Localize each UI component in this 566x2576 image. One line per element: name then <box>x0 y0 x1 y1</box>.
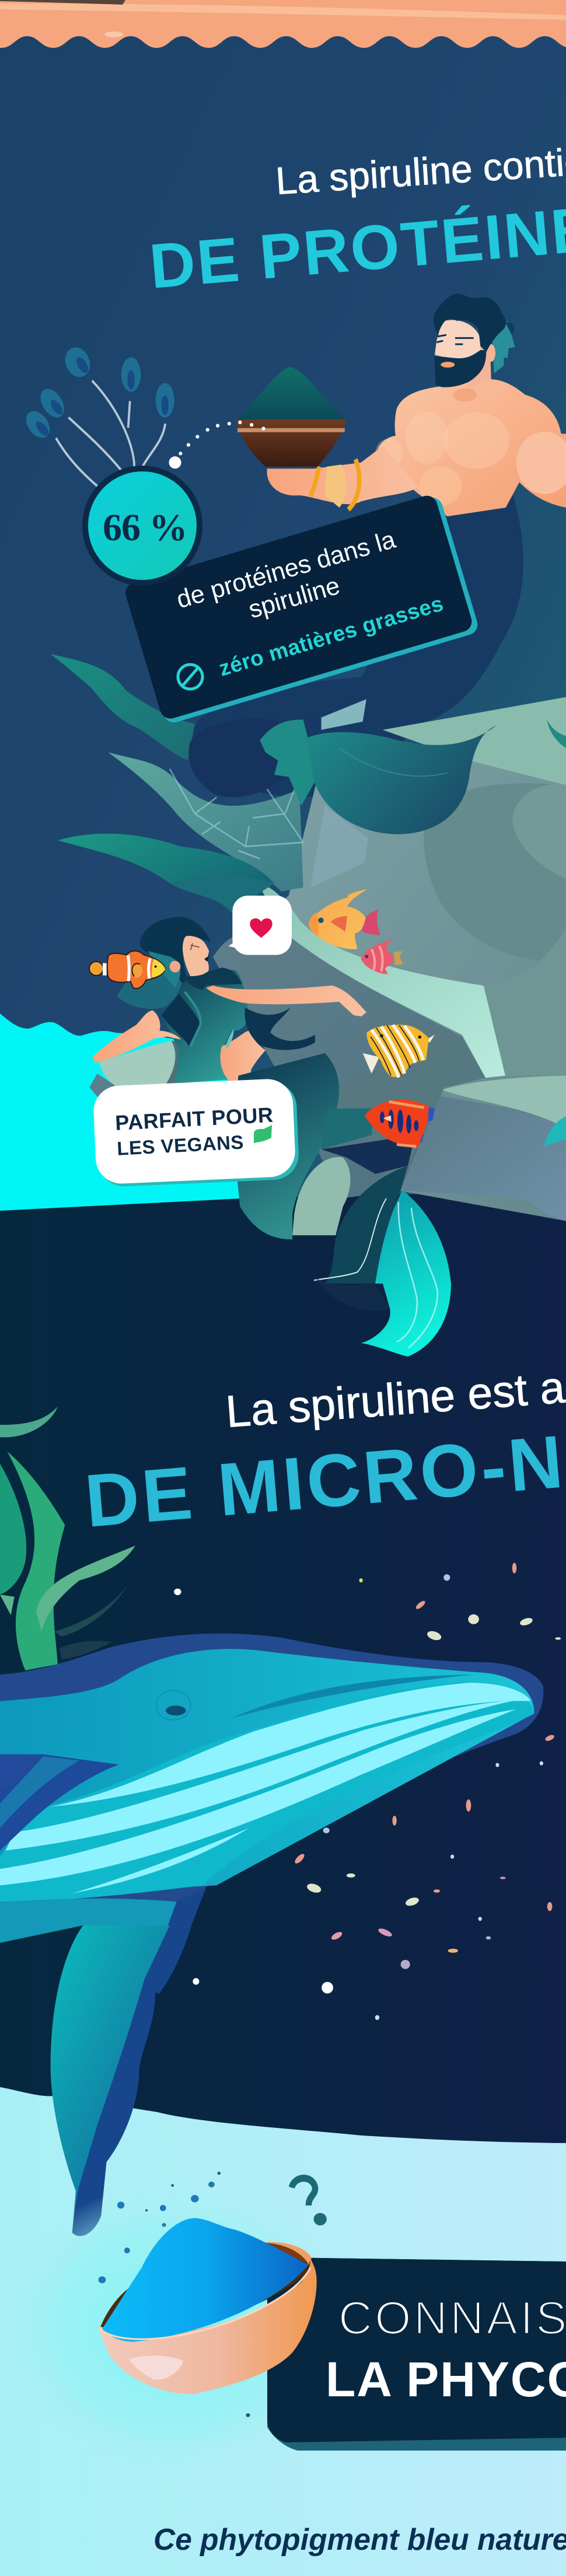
mermaid <box>89 917 315 1099</box>
red fish <box>365 1100 435 1148</box>
krill and plankton cloud <box>174 1563 561 1921</box>
merman arm with bracelets <box>267 446 419 509</box>
sea-plant branches above percentage <box>22 342 174 486</box>
question mark <box>292 2178 327 2225</box>
section background: dark navy sea <box>0 1190 566 2159</box>
callout: perfect for vegans <box>93 1078 300 1187</box>
lower krill and specks <box>193 1927 491 2020</box>
section background: pale blue <box>0 2087 566 2576</box>
bowl of green spirulina <box>236 367 346 467</box>
66 percent badge <box>82 466 202 586</box>
merman tail fin and leaf <box>188 699 566 834</box>
card: protein statement <box>123 492 480 726</box>
mermaid outstretched arm <box>206 985 366 1016</box>
intro sentence: Ce phytopigment bleu naturel <box>153 2522 566 2556</box>
seaweed leaves <box>51 654 303 912</box>
mermaid lower tail <box>235 1053 415 1284</box>
striped yellow fish <box>363 1025 435 1078</box>
section background: blue ocean <box>0 35 566 1225</box>
whale <box>0 1634 543 1925</box>
speech bubble with heart <box>229 896 292 955</box>
top salmon band with wave edge <box>0 0 566 48</box>
card: protein statement: de protéines dans la <box>173 526 399 614</box>
orange angelfish <box>308 889 380 949</box>
small cyan fin on right rock <box>544 1116 566 1147</box>
66 percent badge: 66 % <box>103 506 187 549</box>
card: protein statement: zéro matières grasses <box>216 591 446 681</box>
card: protein statement: spiruline <box>246 572 343 624</box>
dotted line from percentage to bowl <box>169 421 265 469</box>
merman <box>375 293 566 516</box>
glow behind blue bowl <box>0 2182 350 2474</box>
merman tail <box>191 496 523 797</box>
pink fish <box>361 938 403 974</box>
mermaid tail fin <box>315 1190 451 1357</box>
title box: phycocyanin <box>267 2257 566 2451</box>
callout: perfect for vegans: PARFAIT POUR <box>114 1103 274 1135</box>
seaweed on dark section <box>0 1406 135 1670</box>
whale pectoral flipper <box>0 1925 191 2236</box>
section heading: protein <box>147 137 566 302</box>
cyan wave area <box>0 1013 253 1211</box>
blue powder bowl <box>98 2218 317 2394</box>
powder specks <box>99 2172 250 2417</box>
callout: perfect for vegans: LES VEGANS <box>116 1131 244 1159</box>
rock formation <box>213 697 566 1221</box>
